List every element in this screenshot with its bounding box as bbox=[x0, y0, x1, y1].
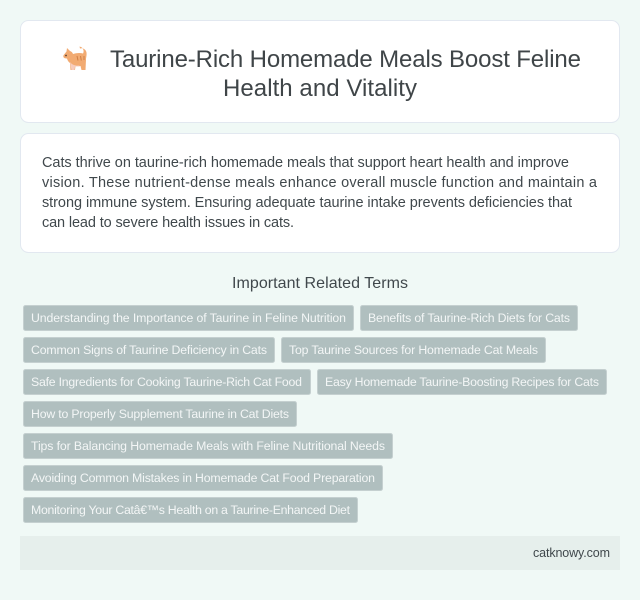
title: Taurine-Rich Homemade Meals Boost Feline bbox=[110, 46, 581, 73]
summary paragraph: Cats thrive on taurine-rich homemade meals that support heart health and improve bbox=[42, 155, 569, 171]
tag 5: Safe Ingredients for Cooking Taurine-Rich Cat Food bbox=[31, 375, 302, 389]
icon: cat bbox=[63, 46, 87, 70]
tag 4 bbox=[282, 338, 546, 362]
tag 10 bbox=[24, 498, 358, 522]
related terms tags bbox=[24, 306, 606, 522]
summary paragraph: vision. These nutrient-dense meals enhance overall muscle function and maintain a bbox=[42, 175, 598, 191]
tag 2: Benefits of Taurine-Rich Diets for Cats bbox=[368, 311, 570, 325]
title bbox=[110, 46, 581, 102]
footer bbox=[20, 536, 620, 570]
tag 2 bbox=[360, 306, 578, 330]
tag 6 bbox=[318, 370, 606, 394]
summary paragraph: can lead to severe health issues in cats. bbox=[42, 215, 294, 231]
summary paragraph bbox=[42, 155, 598, 231]
tag 5 bbox=[24, 370, 310, 394]
title: Health and Vitality bbox=[223, 75, 417, 102]
panel: summary text bbox=[20, 134, 620, 252]
tag 8: Tips for Balancing Homemade Meals with Feline Nutritional Needs bbox=[31, 439, 385, 453]
tag 1: Understanding the Importance of Taurine in Feline Nutrition bbox=[31, 311, 346, 325]
tag 3 bbox=[24, 338, 274, 362]
summary paragraph: strong immune system. Ensuring adequate taurine intake prevents deficiencies that bbox=[42, 195, 572, 211]
tag 3: Common Signs of Taurine Deficiency in Cats bbox=[31, 343, 267, 357]
heading: important related terms: Important Related Terms bbox=[232, 275, 408, 292]
tag 9 bbox=[24, 466, 382, 490]
tag 6: Easy Homemade Taurine-Boosting Recipes for Cats bbox=[325, 375, 599, 389]
footer source text: catknowy.com bbox=[533, 546, 610, 560]
tag 7: How to Properly Supplement Taurine in Cat Diets bbox=[31, 407, 289, 421]
tag 10: Monitoring Your Catâ€™s Health on a Taurine-Enhanced Diet bbox=[31, 503, 351, 517]
tag 4: Top Taurine Sources for Homemade Cat Meals bbox=[289, 343, 538, 357]
tag 1 bbox=[24, 306, 354, 330]
tag 7 bbox=[24, 402, 296, 426]
tag 8 bbox=[24, 434, 392, 458]
panel: title card bbox=[20, 20, 620, 122]
tag 9: Avoiding Common Mistakes in Homemade Cat Food Preparation bbox=[31, 471, 375, 485]
